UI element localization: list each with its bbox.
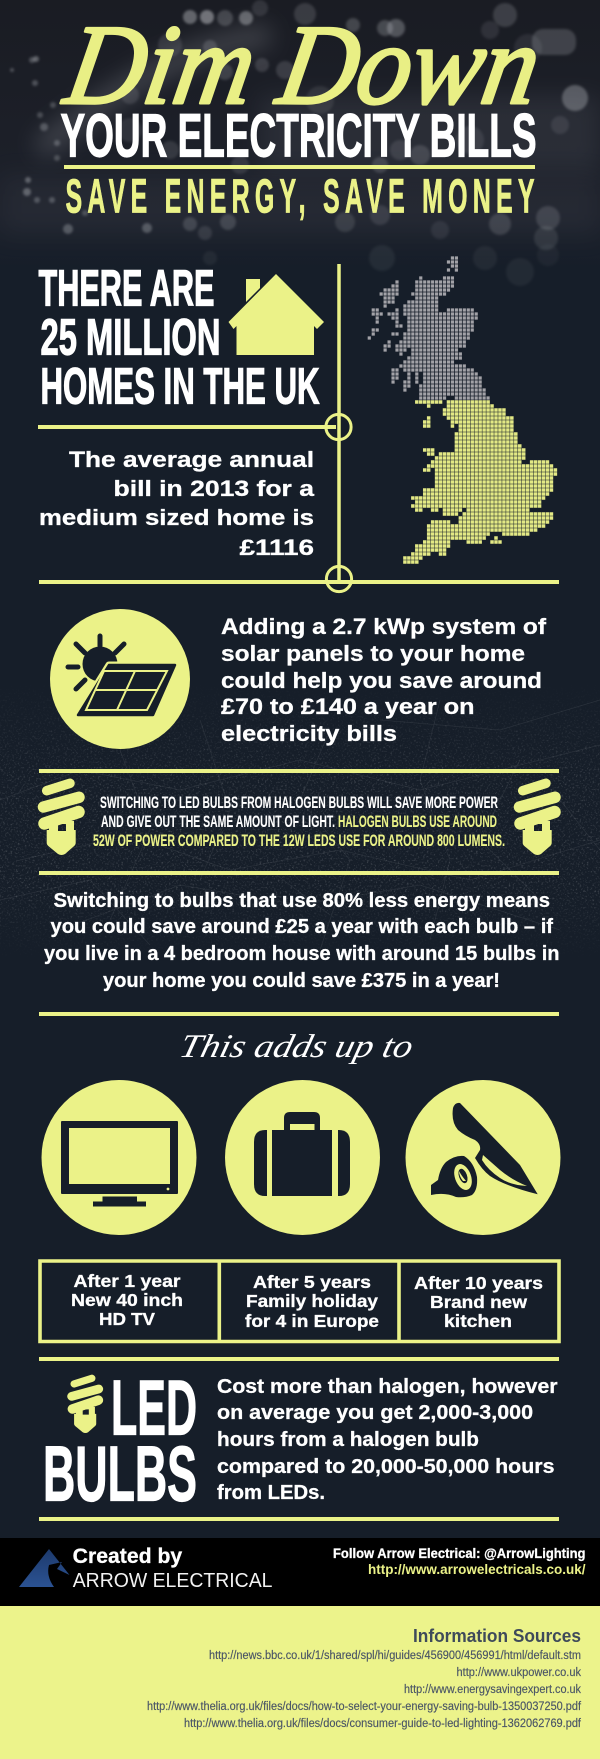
icon: suitcase <box>225 1080 380 1235</box>
panel: icons <box>42 1080 560 1235</box>
panel: payoff table <box>40 1261 559 1342</box>
text: solar savings: £70 to £140 a year on <box>221 694 474 719</box>
source links: http://www.thelia.org.uk/files/docs/how-to-select-your-energy-saving-bulb-1350037250.pdf <box>147 1701 582 1713</box>
text: cost and hours <box>217 1376 558 1504</box>
cell: after 10 years: kitchen <box>444 1311 512 1331</box>
cell: after 1 year: HD TV <box>99 1309 155 1329</box>
heading: there are 25 million homes: THERE ARE <box>38 260 214 317</box>
cell: after 10 years: After 10 years <box>414 1273 543 1293</box>
heading: LED bulbs <box>43 1363 197 1517</box>
text: savings per bulb: your home you could save £375 in a year! <box>103 970 500 992</box>
footer band: created by <box>0 1538 600 1606</box>
heading: information sources: Information Sources <box>413 1626 581 1646</box>
source links: http://www.ukpower.co.uk <box>456 1667 581 1679</box>
icon: sun and solar panel <box>50 609 190 749</box>
heading: there are 25 million homes <box>38 260 320 415</box>
text: cost and hours: on average you get 2,000-3,000 <box>217 1402 533 1424</box>
rule below <box>39 871 559 875</box>
text: average annual bill: bill in 2013 for a <box>114 476 315 501</box>
text: cost and hours: Cost more than halogen, however <box>217 1376 558 1398</box>
heading: LED bulbs: BULBS <box>43 1429 197 1517</box>
text: created by: Created by <box>73 1545 183 1568</box>
rule above <box>39 769 559 773</box>
text: savings per bulb <box>44 890 560 992</box>
script headline: Dim Down <box>56 2 550 128</box>
icon: television <box>42 1080 196 1235</box>
rule under headline <box>64 165 535 169</box>
text: solar savings <box>221 614 547 746</box>
text: savings per bulb: you live in a 4 bedroom house with around 15 bulbs in <box>44 943 560 965</box>
icon: Arrow Electrical logo <box>19 1549 70 1587</box>
connector lines and circles <box>38 264 559 592</box>
header photo background: blurred city lights <box>0 0 600 286</box>
icon: house <box>228 274 324 355</box>
text: switching to LED bulbs: HALOGEN BULBS USE AROUND <box>338 812 497 831</box>
source links: http://www.energysavingexpert.co.uk <box>404 1684 581 1696</box>
icon: knife and onion <box>406 1080 560 1235</box>
icon: bulb right <box>520 783 555 855</box>
cell: after 10 years <box>414 1273 543 1331</box>
map: UK dot-matrix, Scotland grey and England and Wales yellow <box>368 258 558 562</box>
source links: http://www.thelia.org.uk/files/docs/consumer-guide-to-led-lighting-1362062769.pdf <box>184 1718 582 1730</box>
text: solar savings: could help you save around <box>221 668 542 693</box>
text: savings per bulb: Switching to bulbs that use 80% less energy means <box>54 890 550 912</box>
text: company name: ARROW ELECTRICAL <box>73 1569 272 1592</box>
rule below <box>39 1517 559 1521</box>
source links <box>147 1650 582 1730</box>
text: cost and hours: compared to 20,000-50,000 hours <box>217 1456 554 1478</box>
text: switching to LED bulbs: AND GIVE OUT THE SAME AMOUNT OF LIGHT. <box>101 812 335 831</box>
text: follow line: Follow Arrow Electrical: @ArrowLighting <box>333 1546 586 1561</box>
ground texture: faint night-time road network <box>0 700 600 950</box>
text: savings per bulb: you could save around £25 a year with each bulb – if <box>50 916 553 938</box>
text: average annual bill <box>39 447 315 560</box>
cell: after 1 year <box>71 1271 183 1329</box>
panel: LED bulbs <box>39 1357 559 1521</box>
cell: after 1 year: After 1 year <box>74 1271 181 1291</box>
cell: after 5 years: Family holiday <box>246 1291 378 1311</box>
panel: homes in the UK <box>38 258 559 592</box>
heading: this adds up to: This adds up to <box>176 1028 417 1065</box>
text: solar savings: electricity bills <box>221 721 397 746</box>
title: Dim Down Your Electricity Bills <box>56 2 550 224</box>
text: average annual bill: medium sized home is <box>39 505 314 530</box>
heading: there are 25 million homes: 25 MILLION <box>40 309 220 366</box>
table frame <box>40 1261 559 1342</box>
text: cost and hours: hours from a halogen bulb <box>217 1429 479 1451</box>
heading: LED bulbs: LED <box>111 1363 197 1451</box>
panel: information sources <box>0 1606 600 1759</box>
panel: solar panels <box>50 609 547 749</box>
cell: after 5 years <box>245 1272 379 1331</box>
cell: after 5 years: for 4 in Europe <box>245 1311 379 1331</box>
heading: there are 25 million homes: HOMES IN THE UK <box>40 358 320 415</box>
icon: bulb <box>72 1378 99 1433</box>
text: cost and hours: from LEDs. <box>217 1482 325 1504</box>
text: solar savings: solar panels to your home <box>221 641 525 666</box>
text: average annual bill: The average annual <box>69 447 314 472</box>
cell: after 10 years: Brand new <box>430 1292 527 1312</box>
source links: http://news.bbc.co.uk/1/shared/spl/hi/guides/456900/456991/html/default.stm <box>209 1650 581 1662</box>
subheading: SAVE ENERGY, SAVE MONEY <box>66 170 535 224</box>
text: switching to LED bulbs <box>93 793 505 850</box>
cell: after 1 year: New 40 inch <box>71 1290 183 1310</box>
text: website: http://www.arrowelectricals.co.uk/ <box>368 1562 586 1577</box>
panel: LED versus halogen <box>39 769 559 875</box>
icon: bulb left <box>44 783 79 855</box>
map: Scotland region <box>368 258 490 398</box>
text: average annual bill: £1116 <box>240 535 314 560</box>
cell: after 5 years: After 5 years <box>253 1272 371 1292</box>
text: solar savings: Adding a 2.7 kWp system of <box>221 614 547 639</box>
map: England and Wales region <box>403 402 558 562</box>
rule above <box>39 1357 559 1361</box>
rule under savings <box>39 1012 559 1016</box>
